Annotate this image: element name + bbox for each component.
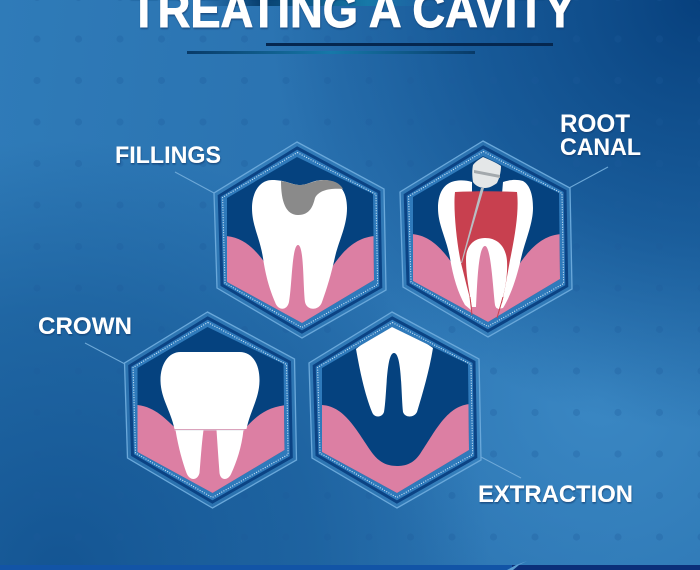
panel: root canal hexagon: [400, 141, 572, 337]
pulp: [454, 191, 518, 305]
title underlines: [187, 43, 553, 54]
gum: [138, 405, 284, 493]
extracted tooth: [356, 320, 433, 416]
crown: [160, 352, 260, 429]
instrument head: [472, 157, 501, 188]
filling: [281, 180, 343, 215]
tooth roots: [176, 430, 244, 479]
bottom strip: [0, 561, 700, 570]
gum: [322, 404, 469, 493]
tooth: [252, 180, 347, 309]
label: root canal: [560, 110, 641, 188]
label: extraction: EXTRACTION: [478, 481, 633, 508]
label: crown: CROWN: [38, 313, 132, 340]
crown seam: [174, 429, 244, 431]
label: fillings: [115, 142, 221, 193]
inner dentine: [466, 238, 507, 309]
panel: extraction hexagon: [309, 312, 481, 508]
title ribbon: [200, 0, 440, 6]
label: root canal: ROOT: [560, 110, 630, 138]
canal tips: [470, 297, 503, 318]
panel: fillings hexagon: [214, 142, 386, 338]
label: extraction: [478, 457, 633, 508]
label: fillings: FILLINGS: [115, 142, 221, 169]
gum between roots: [474, 242, 496, 312]
panel: crown hexagon: [124, 312, 296, 508]
label: root canal: CANAL: [560, 134, 641, 161]
instrument band: [474, 170, 500, 178]
gum: [227, 236, 374, 323]
gum: [413, 234, 560, 322]
label: crown: [38, 313, 132, 364]
needle: [461, 188, 484, 263]
tooth shell: [438, 180, 533, 310]
